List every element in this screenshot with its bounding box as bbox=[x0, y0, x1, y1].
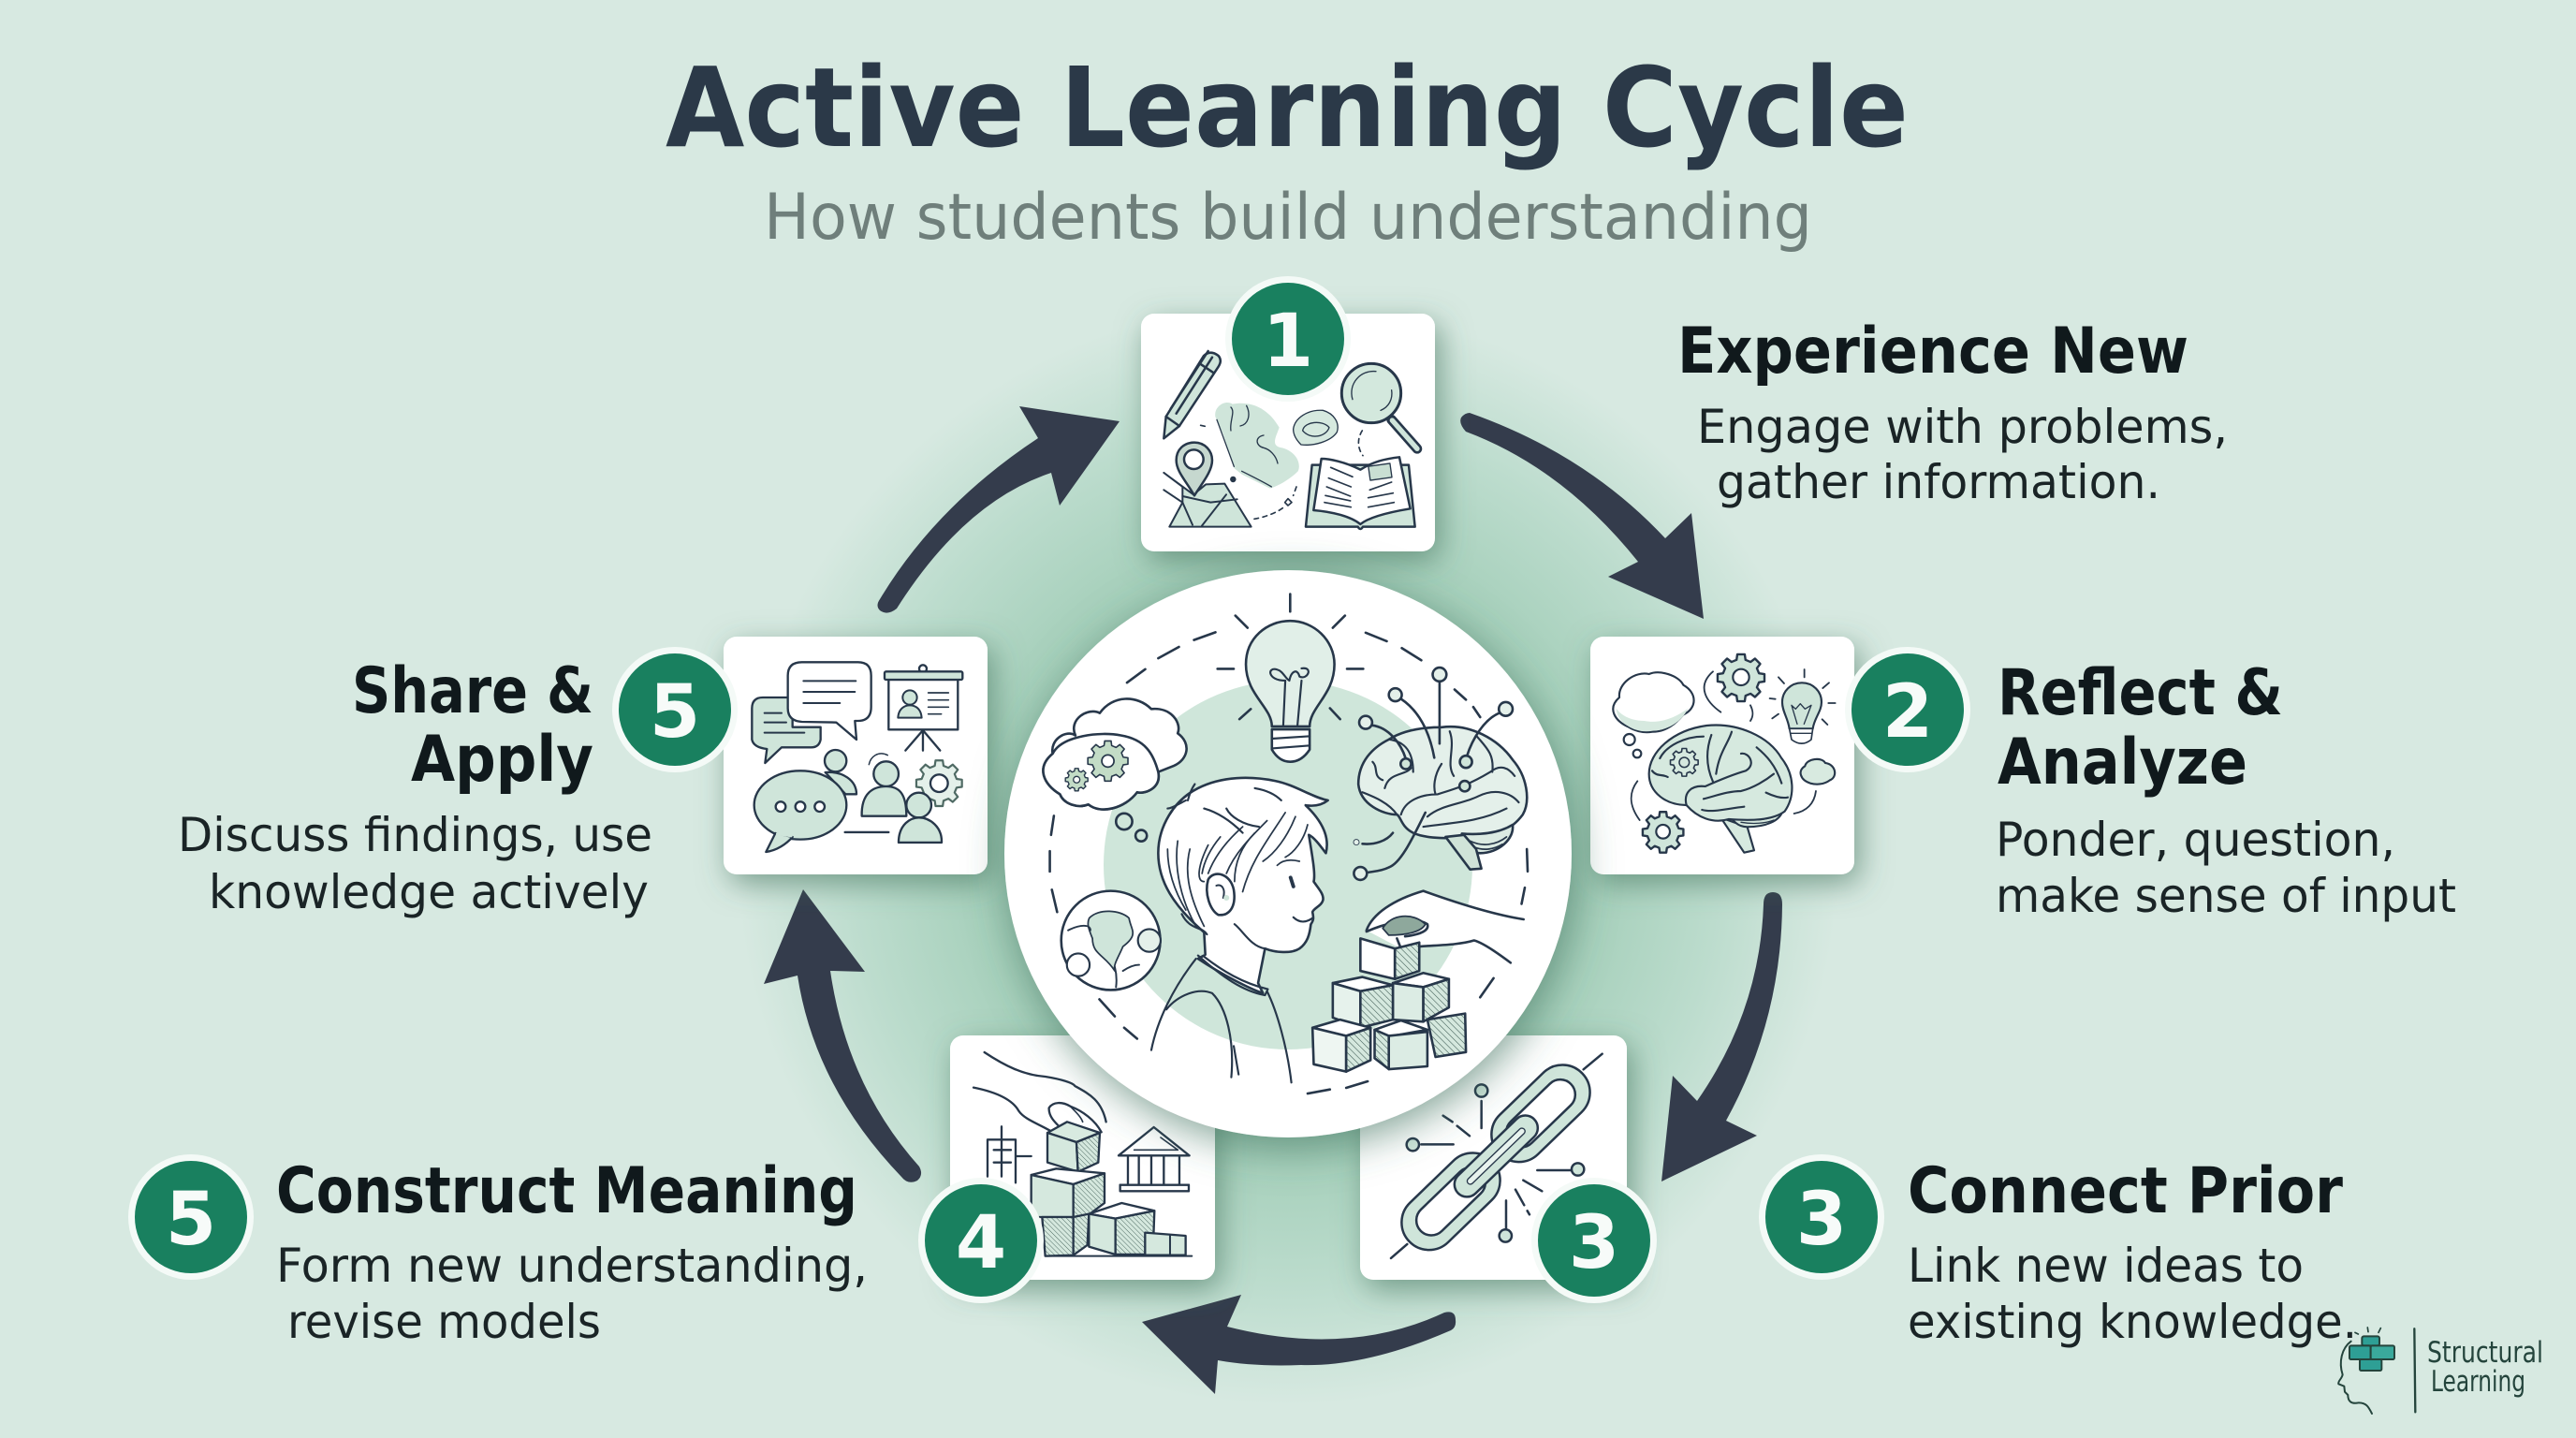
text block: Reflect and Analyze bbox=[1996, 656, 2456, 923]
icon: thought cloud with gears bbox=[1043, 698, 1187, 842]
icon: globe bbox=[1061, 891, 1161, 990]
text block: Share and Apply bbox=[178, 654, 652, 919]
badge: construct label number: 5 bbox=[166, 1178, 216, 1262]
panel: step 4 construct card bbox=[950, 1035, 1215, 1280]
arrow: step 1 to step 2 bbox=[1460, 413, 1704, 619]
text block: Experience New: Experience New bbox=[1677, 315, 2188, 389]
text block: Reflect and Analyze: make sense of input bbox=[1996, 869, 2456, 923]
text block: Reflect and Analyze: Analyze bbox=[1998, 726, 2247, 800]
badge: step 2 bbox=[1845, 647, 1970, 772]
icon: head with blocks bbox=[2338, 1328, 2415, 1414]
illustration: child with ideas, brain, globe and blocks bbox=[1043, 594, 1528, 1093]
text block: Construct Meaning: revise models bbox=[287, 1295, 601, 1349]
badge: step 5 on card bbox=[612, 647, 738, 772]
icon: hand stacking blocks bbox=[1312, 891, 1524, 1072]
badge: step 3 on card bbox=[1531, 1178, 1657, 1303]
text block: Reflect and Analyze: Ponder, question, bbox=[1996, 813, 2395, 867]
panel: step 1 experience card bbox=[1141, 314, 1435, 551]
panel: step 2 reflect card bbox=[1590, 637, 1854, 874]
text block: Experience New: gather information. bbox=[1717, 455, 2160, 509]
text block: Share and Apply: Apply bbox=[411, 723, 593, 797]
text block: Connect Prior: Connect Prior bbox=[1908, 1154, 2343, 1228]
badge: step 4 on card: 4 bbox=[956, 1201, 1006, 1285]
text block: Construct Meaning bbox=[276, 1154, 868, 1349]
badge: step 5 on card: 5 bbox=[650, 670, 700, 755]
panel: step 5 share card bbox=[724, 637, 988, 874]
text block: Connect Prior: Link new ideas to bbox=[1908, 1239, 2304, 1293]
badge: step 1 bbox=[1225, 276, 1351, 402]
badge: step 3 on card: 3 bbox=[1569, 1201, 1619, 1285]
logo: Structural Learning: Structural bbox=[2427, 1336, 2543, 1370]
icon: brain with neural nodes bbox=[1354, 668, 1527, 880]
panel: central learner illustration bbox=[1004, 570, 1572, 1137]
text block: Experience New bbox=[1677, 315, 2228, 509]
arrow: step 2 to step 3 bbox=[1661, 892, 1782, 1181]
badge: step 1: 1 bbox=[1263, 300, 1313, 384]
figure: child in profile bbox=[1151, 778, 1328, 1082]
arrow: step 4 to step 5 bbox=[764, 889, 921, 1182]
text block: Share and Apply: Discuss findings, use bbox=[178, 808, 652, 862]
logo: Structural Learning: Learning bbox=[2431, 1365, 2525, 1399]
text block: Connect Prior: existing knowledge. bbox=[1908, 1295, 2357, 1349]
text block: Share and Apply: knowledge actively bbox=[209, 865, 649, 919]
text block: Share and Apply: Share & bbox=[352, 654, 593, 728]
central green halo bbox=[689, 255, 1887, 1438]
icon: brain with gears and bulb bbox=[1613, 654, 1836, 853]
badge: connect label number bbox=[1759, 1154, 1884, 1280]
icon: hand building with blocks bbox=[973, 1052, 1192, 1256]
title: Active Learning Cycle bbox=[666, 43, 1909, 172]
arrow: step 5 to step 1 bbox=[878, 406, 1120, 613]
badge: step 2: 2 bbox=[1882, 670, 1933, 755]
badge: connect label number: 3 bbox=[1796, 1178, 1847, 1262]
icon: discussion and presentation bbox=[752, 662, 962, 852]
text block: Construct Meaning: Construct Meaning bbox=[276, 1154, 857, 1228]
panel: step 3 connect card bbox=[1360, 1035, 1627, 1280]
icon: light bulb bbox=[1218, 594, 1363, 762]
text block: Construct Meaning: Form new understanding, bbox=[276, 1239, 868, 1293]
badge: construct label number bbox=[128, 1154, 254, 1280]
text block: Reflect and Analyze: Reflect & bbox=[1998, 656, 2283, 730]
logo: Structural Learning bbox=[2338, 1328, 2543, 1414]
text block: Connect Prior bbox=[1908, 1154, 2357, 1349]
icon: chain links bbox=[1390, 1053, 1603, 1261]
arrow: step 3 to step 4 bbox=[1142, 1295, 1456, 1394]
subtitle: How students build understanding bbox=[764, 181, 1812, 255]
badge: step 4 on card bbox=[918, 1178, 1044, 1303]
text block: Experience New: Engage with problems, bbox=[1697, 400, 2228, 454]
icon: exploration objects bbox=[1164, 351, 1417, 529]
